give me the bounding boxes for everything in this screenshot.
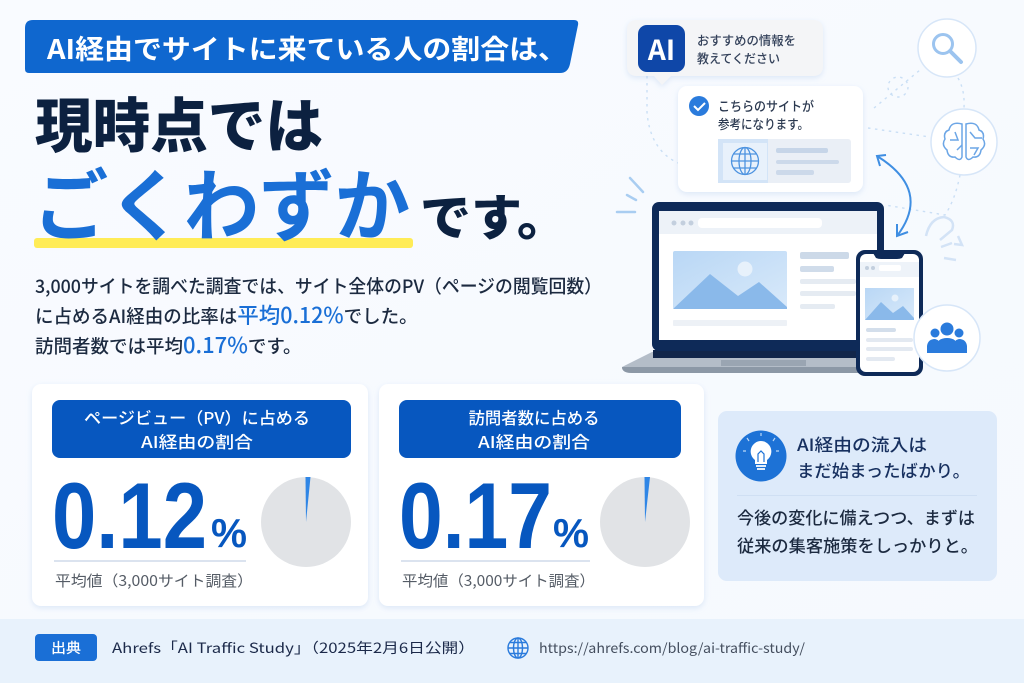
takeaway body xyxy=(737,504,978,557)
intro text: 3,000サイトを調べた調査では、サイト全体のPV（ページの閲覧回数） xyxy=(35,273,602,299)
main title line 1: 現時点では xyxy=(35,79,323,164)
source badge: 出典 xyxy=(51,638,81,658)
banner heading: AI経由でサイトに来ている人の割合は、 xyxy=(46,28,567,67)
dotted connectors xyxy=(647,70,964,215)
visitor caption: 平均値（3,000サイト調査） xyxy=(402,570,595,591)
visitor value: 0.17 xyxy=(399,463,552,568)
visitor pie chart xyxy=(600,477,690,567)
panel: takeaway xyxy=(718,411,997,581)
chat bubble: question: おすすめの情報を xyxy=(697,30,796,49)
panel: PV share xyxy=(32,384,368,606)
visitor panel header xyxy=(399,400,681,458)
icon: magnifier xyxy=(918,19,976,77)
intro text: 訪問者数では平均0.17%です。 xyxy=(35,328,302,360)
chat bubble: question xyxy=(627,20,823,85)
takeaway body: 今後の変化に備えつつ、まずは xyxy=(737,504,975,529)
takeaway heading xyxy=(797,431,970,482)
laptop xyxy=(622,202,884,373)
visitor panel header: 訪問者数に占める xyxy=(468,405,600,429)
PV pie chart xyxy=(261,477,351,567)
PV panel header xyxy=(52,400,351,458)
chat bubble: question: 教えてください xyxy=(697,48,780,67)
PV panel header: ページビュー（PV）に占める xyxy=(84,405,310,429)
banner heading xyxy=(25,20,578,73)
yellow underline xyxy=(34,238,413,248)
panel: visitor share xyxy=(379,384,704,606)
chat bubble: answer: 参考になります。 xyxy=(718,114,809,133)
takeaway heading: まだ始まったばかり。 xyxy=(797,457,970,482)
faint question mark shapes xyxy=(926,217,962,260)
icon: people xyxy=(914,305,980,371)
PV value: % xyxy=(211,510,247,556)
footer: source xyxy=(0,619,1024,683)
intro text: に占めるAI経由の比率は平均0.12%でした。 xyxy=(35,299,418,330)
intro text xyxy=(35,273,602,360)
visitor panel header: AI経由の割合 xyxy=(478,429,591,453)
chat bubble: question: AI xyxy=(647,29,675,69)
PV panel header: AI経由の割合 xyxy=(141,429,254,453)
source text: Ahrefs「AI Traffic Study」（2025年2月6日公開） xyxy=(112,638,475,658)
icon: globe xyxy=(508,638,528,658)
visitor value: % xyxy=(553,510,589,556)
main title line 2: ごくわずか xyxy=(33,145,410,257)
arrow: two-way between chat and devices xyxy=(877,155,911,236)
PV caption: 平均値（3,000サイト調査） xyxy=(55,570,253,591)
chat bubble: answer: こちらのサイトが xyxy=(718,96,814,115)
chat bubble: answer xyxy=(678,86,863,192)
decorative sparks left of laptop xyxy=(617,178,643,212)
phone xyxy=(856,250,923,376)
icon: brain xyxy=(931,109,997,175)
icon: light bulb xyxy=(736,430,786,482)
takeaway body: 従来の集客施策をしっかりと。 xyxy=(737,532,978,557)
PV value: 0.12 xyxy=(52,463,207,568)
main title line 2: です。 xyxy=(420,179,568,250)
source badge xyxy=(35,634,97,661)
illustration: AI chat and devices xyxy=(617,19,997,376)
source URL: https://ahrefs.com/blog/ai-traffic-study/ xyxy=(539,637,806,657)
takeaway heading: AI経由の流入は xyxy=(797,431,927,456)
